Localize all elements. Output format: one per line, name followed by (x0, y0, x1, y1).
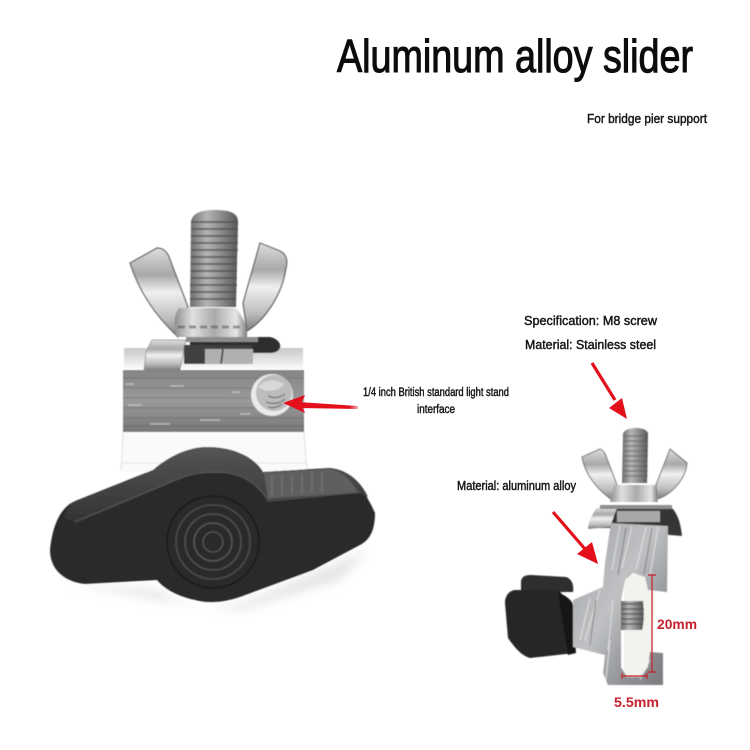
left wing of wing nut (130, 248, 188, 337)
aluminum plate (573, 523, 668, 685)
block top face (124, 348, 303, 370)
label: aluminum alloy material: Material: aluminum alloy (457, 479, 577, 493)
concentric rings on knob (167, 496, 259, 588)
knob drop shadow (70, 550, 368, 610)
white lower section of the block (121, 432, 307, 472)
label: light stand interface (363, 387, 509, 416)
dimension: 5.5mm: 5.5mm (614, 695, 659, 710)
label: light stand interface: interface (417, 404, 455, 416)
small washer (588, 505, 682, 536)
arrow: pointing at the 1/4 inch hole (283, 395, 358, 413)
block front face (123, 370, 304, 432)
black knob (50, 447, 375, 602)
small screw (622, 428, 648, 483)
dimension: 5.5mm (614, 673, 659, 710)
small black knob (505, 575, 576, 658)
right wing of wing nut (243, 243, 287, 331)
wing nut dome (174, 308, 247, 337)
main product photo: slider with wing nut and black knob (50, 210, 375, 610)
label: screw specification and material: Specification: M8 screw (524, 313, 658, 328)
label: screw specification and material: Material: Stainless steel (525, 337, 656, 352)
small left wing (582, 449, 617, 500)
label: light stand interface: 1/4 inch British standard light stand (363, 387, 509, 399)
arrow: pointing at the aluminum body (553, 512, 598, 564)
threaded hole (251, 374, 293, 416)
small right wing (656, 449, 687, 499)
label: screw specification and material (524, 313, 658, 352)
small nut dome (610, 485, 658, 502)
slot backing (624, 575, 655, 678)
threaded bolt (190, 210, 238, 307)
dimension: 20mm (648, 575, 697, 672)
arrow: pointing at the screw (592, 363, 627, 419)
dimension: 20mm: 20mm (657, 617, 697, 632)
hex nut (184, 345, 252, 364)
subtitle: For bridge pier support (587, 111, 707, 126)
small inner screw (621, 601, 644, 630)
washer (144, 337, 280, 370)
side view product photo (505, 428, 687, 685)
